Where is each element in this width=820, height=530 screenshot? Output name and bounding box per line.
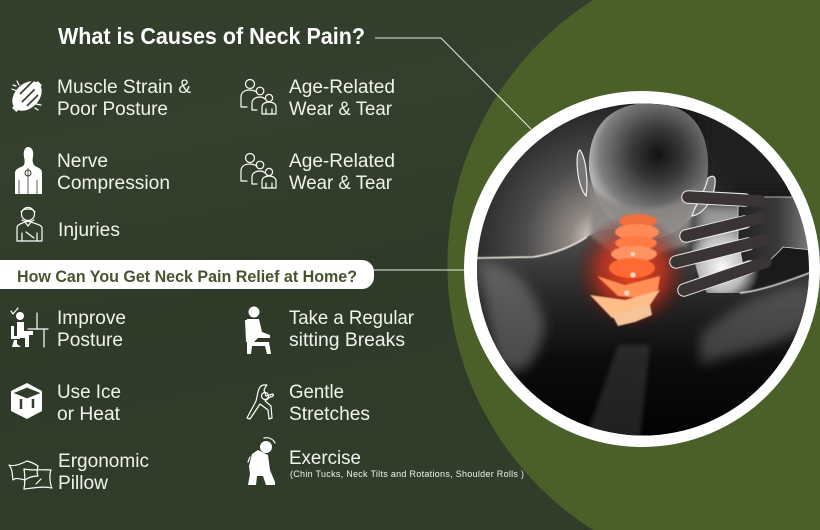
- label: posture: Posture: [57, 330, 123, 351]
- icon: gentle stretches: [247, 385, 273, 419]
- relief list: [9, 306, 524, 494]
- icon: age-related group second: [241, 154, 276, 188]
- label: wear and tear second: Wear & Tear: [289, 173, 393, 194]
- label: gentle: Gentle: [289, 382, 344, 403]
- causes list: [6, 75, 395, 241]
- icon: improve posture desk: [11, 308, 48, 347]
- hand: [676, 197, 812, 290]
- label: poor posture: Poor Posture: [57, 99, 168, 120]
- icon: injuries person: [17, 208, 42, 241]
- label: exercise details: (Chin Tucks, Neck Tilts and Rotations, Shoulder Rolls ): [290, 469, 524, 479]
- label: nerve: Nerve: [57, 151, 108, 172]
- label: exercise: Exercise: [289, 448, 361, 469]
- icon: age-related group: [241, 80, 276, 114]
- icon: nerve compression torso: [15, 147, 42, 194]
- label: wear and tear: Wear & Tear: [289, 99, 393, 120]
- label: compression: Compression: [57, 173, 170, 194]
- heading pill: relief: [0, 260, 374, 289]
- label: use ice: Use Ice: [57, 382, 121, 403]
- spine vertebrae: [590, 214, 660, 326]
- icon: muscle strain: [6, 75, 48, 117]
- label: pillow: Pillow: [58, 473, 108, 494]
- icon: sitting break: [245, 306, 271, 354]
- icon: ergonomic pillow: [9, 461, 52, 489]
- label: age-related second: Age-Related: [289, 151, 395, 172]
- label: age-related: Age-Related: [289, 77, 395, 98]
- label: or heat: or Heat: [57, 404, 121, 425]
- icon: neck exercise: [248, 438, 275, 485]
- icon: use ice or heat box: [11, 383, 42, 419]
- title: causes: What is Causes of Neck Pain?: [58, 23, 365, 49]
- label: injuries: Injuries: [58, 220, 120, 241]
- connector line: relief: [372, 269, 466, 271]
- label: improve: Improve: [57, 308, 126, 329]
- neck pain photo illustration: [464, 91, 820, 447]
- label: muscle strain: Muscle Strain &: [57, 77, 191, 98]
- connector line: causes: [375, 38, 531, 129]
- heading pill: relief: How Can You Get Neck Pain Relief at Home?: [17, 267, 357, 286]
- label: sitting breaks: sitting Breaks: [289, 330, 405, 351]
- label: stretches: Stretches: [289, 404, 370, 425]
- green arc backdrop: [447, 0, 820, 530]
- label: ergonomic: Ergonomic: [58, 451, 149, 472]
- label: take a regular: Take a Regular: [289, 308, 415, 329]
